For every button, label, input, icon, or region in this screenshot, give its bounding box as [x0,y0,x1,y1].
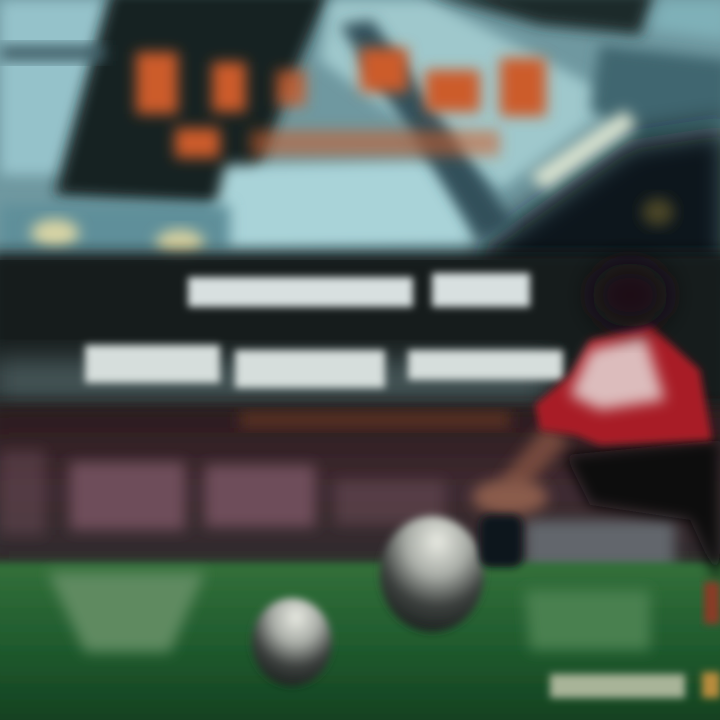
crowd: orange rim [240,412,510,428]
roof band: lower edge [0,205,230,253]
player: head [592,263,668,327]
caption: blurred bottom right logo [550,672,720,698]
player [472,263,720,624]
text block: second blurred white line [85,345,563,388]
stands: pale lower tier [0,358,550,404]
player: leg [704,582,720,624]
roof panel: upper glass [320,0,620,190]
player: white shirt panel [570,335,665,410]
crowd: grey right patch [525,520,675,578]
player: arm [500,425,570,495]
heading: orange blurred title [136,48,546,158]
stands: dark band [0,252,720,412]
roof panel: dark truss [55,0,330,205]
pitch marking: left [48,572,205,652]
roof beam: diagonal [340,20,515,240]
football: small left ball [252,598,332,686]
roof panel: top right glass [650,0,720,40]
floodlight: left [31,219,79,247]
crowd stand [0,405,720,570]
text block: first blurred white line [188,273,530,307]
roof highlight: bright beam [530,110,637,190]
pitch marking: right [525,590,650,650]
roof panel: right blue girders [590,45,720,140]
player: red shirt [535,325,712,445]
player: shorts [565,440,720,585]
roof beam: horizontal left [0,45,105,61]
stadium roof [0,0,720,300]
roof panel: right dark structure [470,125,720,300]
pitch [0,562,720,720]
crowd: mauve patches [0,450,445,535]
floodlight: centre [156,229,204,257]
roof panel: centre glass [205,160,478,250]
player: boot [480,515,522,567]
roof panel: top left glass [0,0,108,175]
player: hand [472,479,548,515]
floodlight: right [642,198,674,226]
football: centre ball [380,516,484,632]
roof panel: top right dark [420,0,655,35]
